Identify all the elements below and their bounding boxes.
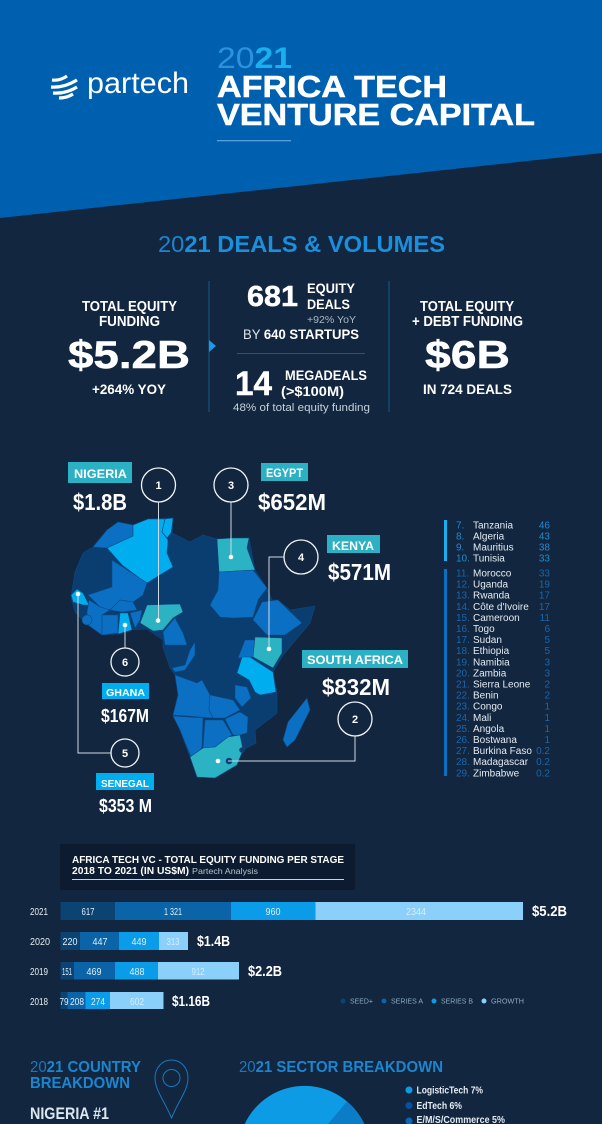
callout: Ghana	[101, 623, 149, 726]
title: AFRICA TECH	[217, 70, 447, 104]
bar: 2018	[30, 992, 210, 1010]
list: countries ranked 11 to 29: Côte d'Ivoire	[473, 602, 529, 613]
bar: 2020: 220	[62, 937, 78, 948]
panel: equity deals and megadeals: BY 640 STARTUPS	[243, 326, 359, 342]
list: countries ranked 7 to 10: 33	[539, 554, 550, 564]
chart title box: AFRICA TECH VC - TOTAL EQUITY FUNDING PER STAGE	[72, 855, 344, 866]
list: countries ranked 11 to 29: 28.	[456, 757, 470, 768]
callout: Egypt: EGYPT	[266, 466, 304, 480]
panel: total equity funding	[68, 299, 190, 397]
chart legend: GROWTH	[491, 996, 524, 1006]
list: countries ranked 11 to 29: 11.	[456, 568, 469, 580]
bar: 2018: 274	[91, 997, 105, 1008]
list: countries ranked 11 to 29: 26.	[456, 735, 470, 746]
callout: Egypt: 3	[228, 480, 234, 492]
list: countries ranked 11 to 29: 1	[544, 713, 550, 724]
callout: South Africa	[216, 650, 408, 763]
chart title box: 2018 TO 2021 (IN US$M)	[72, 866, 189, 877]
panel: total equity and debt funding: IN 724 DEALS	[423, 381, 512, 397]
bar: 2019: 2019	[30, 966, 48, 978]
title: VENTURE CAPITAL	[217, 98, 535, 132]
chart legend: SERIES B	[441, 996, 473, 1006]
list: countries ranked 11 to 29: 16.	[456, 624, 470, 635]
bar: 2019: $2.2B	[248, 963, 282, 980]
list: countries ranked 11 to 29: Zimbabwe	[473, 768, 520, 779]
pie chart: sector breakdown	[245, 1086, 364, 1124]
callout: Senegal: $353 M	[99, 796, 152, 816]
list: countries ranked 7 to 10: 43	[539, 532, 550, 542]
bar: 2021: 960	[266, 907, 281, 918]
panel: equity deals and megadeals: 48% of total equity funding	[233, 402, 370, 414]
callout: Kenya: 4	[298, 552, 305, 564]
bar: 2021: 1 321	[164, 907, 182, 918]
list: countries ranked 11 to 29: Benin	[473, 691, 499, 702]
bar: 2018: 208	[70, 997, 84, 1008]
list: countries ranked 7 to 10: 7.	[456, 520, 464, 532]
callout: Egypt	[214, 463, 326, 559]
panel: equity deals and megadeals: +92% YoY	[307, 315, 356, 326]
list: countries ranked 11 to 29: 20.	[456, 668, 470, 679]
legend: sectors	[406, 1086, 505, 1124]
bar: 2020: 2020	[30, 936, 50, 948]
callout: Senegal	[76, 592, 154, 816]
list: countries ranked 7 to 10: 9.	[456, 542, 464, 554]
list: countries ranked 11 to 29: Angola	[473, 724, 505, 735]
legend: sectors: EdTech 6%	[416, 1101, 462, 1112]
list: countries ranked 7 to 10: Algeria	[473, 532, 505, 542]
list: countries ranked 11 to 29: 29.	[456, 768, 470, 779]
bar: 2018: 79	[60, 997, 69, 1008]
list: countries ranked 11 to 29: 33	[539, 568, 550, 580]
bar: 2021	[30, 902, 567, 920]
list: countries ranked 11 to 29: Togo	[473, 624, 495, 635]
list: countries ranked 11 to 29: 12.	[456, 580, 470, 591]
panel: equity deals and megadeals: DEALS	[307, 296, 350, 312]
panel: equity deals and megadeals: 14	[235, 365, 272, 403]
heading: Nigeria rank: NIGERIA #1	[30, 1104, 109, 1123]
heading: deals and volumes: 2021 DEALS & VOLUMES	[158, 231, 445, 257]
callout: Kenya: KENYA	[332, 539, 374, 553]
list: countries ranked 11 to 29: 1	[544, 702, 550, 713]
logo wordmark: partech	[87, 67, 189, 100]
panel: equity deals and megadeals: 681	[247, 281, 298, 313]
list: countries ranked 11 to 29: Mali	[473, 713, 491, 724]
list: countries ranked 11 to 29: 2	[544, 680, 550, 690]
list: countries ranked 7 to 10: 46	[539, 520, 550, 532]
list: countries ranked 11 to 29: 17	[539, 602, 550, 613]
bar: 2020	[30, 932, 230, 950]
list: countries ranked 11 to 29: Bostwana	[473, 735, 517, 746]
list: countries ranked 11 to 29: Rwanda	[473, 591, 510, 602]
legend: sectors: LogisticTech 7%	[416, 1086, 483, 1096]
icon: location pin	[155, 1060, 188, 1118]
heading: country breakdown	[30, 1059, 141, 1092]
callout: Egypt: $652M	[258, 489, 326, 515]
list: countries ranked 11 to 29: 13.	[456, 591, 470, 602]
panel: total equity and debt funding	[412, 299, 523, 397]
list: countries ranked 11 to 29: 0.2	[536, 768, 550, 779]
callout: South Africa: 2	[352, 714, 358, 726]
title: 2021	[217, 42, 292, 75]
bar: 2021: 2344	[406, 907, 426, 918]
divider	[388, 281, 390, 412]
list: countries ranked 11 to 29: Zambia	[473, 668, 507, 679]
chart title box: Partech Analysis	[192, 866, 258, 876]
list: countries ranked 11 to 29: Burkina Faso	[473, 746, 532, 757]
list: countries ranked 11 to 29: 21.	[456, 680, 470, 690]
panel: equity deals and megadeals: EQUITY	[307, 280, 356, 296]
list: countries ranked 11 to 29	[444, 568, 550, 779]
list: countries ranked 11 to 29: 17.	[456, 635, 470, 646]
bar: 2019	[30, 962, 282, 980]
list: countries ranked 7 to 10: Mauritius	[473, 542, 514, 554]
bar: 2021: 2021	[30, 906, 48, 918]
callout: Senegal: 5	[122, 748, 128, 760]
list: countries ranked 11 to 29: 18.	[456, 646, 470, 657]
list: countries ranked 11 to 29: 25.	[456, 724, 470, 735]
bar chart: equity funding per stage	[30, 902, 567, 1010]
list: countries ranked 11 to 29: 22.	[456, 691, 470, 702]
bar: 2018: $1.16B	[172, 993, 210, 1010]
list: countries ranked 11 to 29: 5	[544, 646, 550, 657]
panel: total equity funding: TOTAL EQUITY	[82, 299, 177, 315]
header banner	[0, 0, 602, 218]
bar: 2018: 2018	[30, 996, 48, 1008]
list: countries ranked 11 to 29: 5	[544, 635, 550, 646]
panel: equity deals and megadeals: MEGADEALS	[285, 367, 367, 383]
callout: Senegal: SENEGAL	[101, 778, 150, 790]
list: countries ranked 11 to 29: 24.	[456, 713, 470, 724]
list: countries ranked 7 to 10: 8.	[456, 532, 464, 542]
list: countries ranked 11 to 29: Sudan	[473, 635, 502, 646]
bar: 2018: 602	[130, 997, 144, 1008]
bar: 2021: 617	[82, 907, 95, 918]
list: countries ranked 11 to 29: 0.2	[536, 757, 550, 768]
bar: 2019: 151	[62, 967, 72, 978]
list: countries ranked 7 to 10: Tanzania	[473, 520, 513, 532]
panel: equity deals and megadeals	[233, 280, 370, 414]
list: countries ranked 11 to 29: Sierra Leone	[473, 680, 531, 690]
list: countries ranked 11 to 29: 23.	[456, 702, 470, 713]
list: countries ranked 7 to 10: Tunisia	[473, 554, 505, 564]
bar: 2020: 447	[92, 937, 108, 948]
bar: 2020: 449	[132, 937, 147, 948]
map of Africa	[71, 518, 315, 778]
callout: Ghana: GHANA	[106, 687, 145, 699]
list: countries ranked 11 to 29: Morocco	[473, 568, 512, 580]
list: countries ranked 11 to 29: 1	[544, 735, 550, 746]
list: countries ranked 7 to 10: 10.	[456, 554, 470, 564]
callout: Kenya	[267, 535, 391, 651]
panel: total equity and debt funding: + DEBT FUNDING	[412, 314, 523, 330]
list: countries ranked 11 to 29: 6	[544, 624, 550, 635]
chart title box	[60, 844, 355, 890]
chart legend: SEED+	[350, 996, 374, 1006]
list: countries ranked 11 to 29: 2	[544, 691, 550, 702]
bar: 2020: $1.4B	[197, 933, 230, 950]
list: countries ranked 11 to 29: 0.2	[536, 746, 550, 757]
panel: equity deals and megadeals: (>$100M)	[281, 383, 344, 399]
list: countries ranked 11 to 29: 27.	[456, 746, 470, 757]
icon: partech logo	[51, 76, 77, 98]
heading: country breakdown: 2021 COUNTRY	[30, 1059, 141, 1076]
list: countries ranked 11 to 29: Congo	[473, 702, 503, 713]
list: countries ranked 11 to 29: 17	[539, 591, 550, 602]
list: countries ranked 11 to 29: 1	[544, 724, 550, 735]
title	[217, 42, 535, 141]
list: countries ranked 11 to 29: 3	[544, 668, 550, 679]
callout: Nigeria: NIGERIA	[74, 467, 127, 481]
list: countries ranked 11 to 29: Ethiopia	[473, 646, 510, 657]
bar: 2021: $5.2B	[532, 903, 567, 920]
callout: South Africa: SOUTH AFRICA	[307, 653, 403, 667]
callout: Ghana: 6	[122, 657, 128, 669]
list: countries ranked 11 to 29: 19	[539, 580, 550, 591]
callout: Nigeria: 1	[155, 480, 162, 492]
list: countries ranked 11 to 29: 19.	[456, 657, 470, 668]
list: countries ranked 11 to 29: 3	[544, 657, 550, 668]
list: countries ranked 11 to 29: Namibia	[473, 657, 510, 668]
bar: 2019: 912	[192, 967, 205, 978]
bar: 2020: 313	[166, 937, 180, 948]
list: countries ranked 11 to 29: 14.	[456, 602, 470, 613]
list: countries ranked 11 to 29: 15.	[456, 613, 470, 624]
list: countries ranked 11 to 29: Cameroon	[473, 613, 520, 624]
chart legend: SERIES A	[391, 996, 423, 1006]
bar: 2019: 488	[130, 967, 145, 978]
divider with arrow	[208, 281, 216, 412]
list: countries ranked 7 to 10: 38	[539, 542, 550, 554]
callout: Nigeria: $1.8B	[73, 489, 127, 515]
list: countries ranked 11 to 29: Madagascar	[473, 757, 529, 768]
heading: country breakdown: BREAKDOWN	[30, 1075, 130, 1092]
bar: 2019: 469	[86, 967, 102, 978]
callout: Kenya: $571M	[328, 559, 391, 585]
callout: Nigeria	[68, 462, 176, 623]
panel: total equity and debt funding: $6B	[425, 334, 510, 377]
callout: Ghana: $167M	[101, 706, 149, 726]
list: countries ranked 7 to 10	[444, 520, 550, 564]
panel: total equity funding: FUNDING	[99, 314, 160, 330]
list: countries ranked 11 to 29: Uganda	[473, 580, 508, 591]
list: countries ranked 11 to 29: 11	[540, 613, 550, 624]
chart legend	[340, 996, 524, 1006]
panel: total equity and debt funding: TOTAL EQUITY	[420, 299, 514, 315]
panel: total equity funding: +264% YOY	[92, 381, 167, 397]
heading: sector breakdown: 2021 SECTOR BREAKDOWN	[239, 1059, 443, 1076]
callout: South Africa: $832M	[322, 674, 390, 700]
panel: total equity funding: $5.2B	[68, 334, 190, 377]
